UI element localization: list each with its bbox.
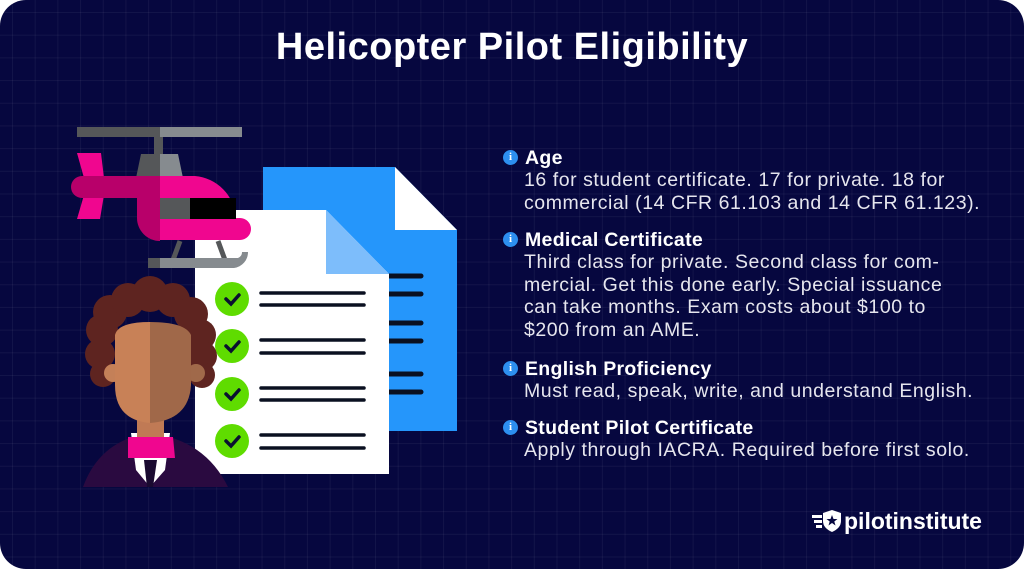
- icon: person: [83, 276, 228, 487]
- text block: age: commercial (14 CFR 61.103 and 14 CFR 61.123).: [524, 192, 980, 214]
- text block: student pilot certificate: [503, 417, 970, 461]
- text block: english proficiency: English Proficiency: [525, 358, 712, 380]
- icon: blue document: [263, 167, 457, 431]
- title: Helicopter Pilot Eligibility: [276, 26, 748, 68]
- text block: medical certificate: [503, 229, 942, 340]
- icon: white checklist document: [195, 210, 389, 474]
- text block: age: i: [509, 151, 512, 163]
- text block: medical certificate: mercial. Get this done early. Special issuance: [524, 274, 942, 296]
- text block: student pilot certificate: i: [509, 421, 512, 433]
- text block: medical certificate: $200 from an AME.: [524, 318, 700, 340]
- text block: medical certificate: Third class for private. Second class for com-: [524, 251, 939, 273]
- logo: pilotinstitute: [844, 508, 982, 534]
- text block: medical certificate: i: [509, 233, 512, 245]
- icon: helicopter: [71, 127, 251, 268]
- text block: english proficiency: [503, 358, 973, 402]
- text block: english proficiency: i: [509, 362, 512, 374]
- text block: student pilot certificate: Student Pilot Certificate: [525, 417, 754, 439]
- text block: medical certificate: can take months. Exam costs about $100 to: [524, 296, 926, 318]
- text block: student pilot certificate: Apply through IACRA. Required before first solo.: [524, 439, 970, 461]
- text block: age: 16 for student certificate. 17 for private. 18 for: [524, 169, 945, 191]
- text block: english proficiency: Must read, speak, write, and understand English.: [524, 380, 973, 402]
- text block: medical certificate: Medical Certificate: [525, 229, 703, 251]
- illustration: [71, 127, 457, 487]
- text block: age: [503, 147, 980, 214]
- text block: age: Age: [525, 147, 563, 169]
